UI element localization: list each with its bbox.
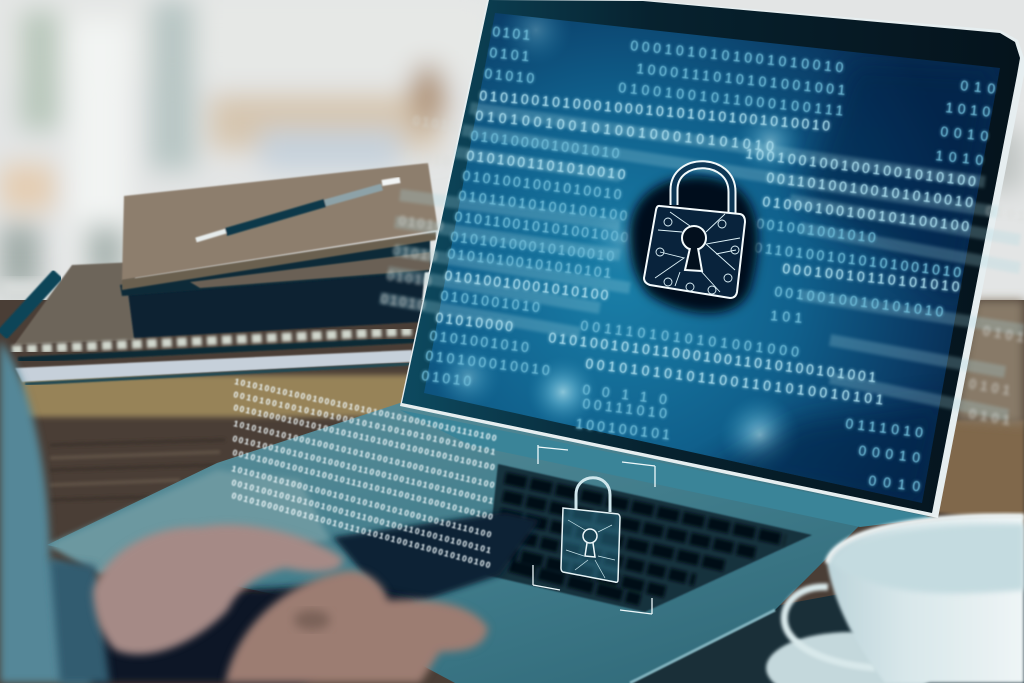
- binary code on screen: 0101: [492, 23, 531, 43]
- binary code on screen: 001010101011001101010010101: [585, 355, 885, 408]
- binary code on screen: 0101: [489, 44, 530, 64]
- binary code on screen: 01001001011000100111: [618, 79, 844, 119]
- right hand: [225, 571, 488, 683]
- binary code on screen: 0101001001010010: [462, 167, 623, 203]
- notebooks and pen: [2, 163, 438, 384]
- binary code on screen: 01000100100101100100: [762, 193, 970, 234]
- dark book: [128, 270, 425, 338]
- binary code on screen: 0010: [940, 123, 989, 144]
- holographic binary over trackpad: 10101001010001000101010100101000100101110100: [234, 376, 498, 443]
- ghost digits outside the screen: 01010: [380, 290, 427, 313]
- phone: [333, 512, 540, 600]
- top notebook: [122, 163, 438, 280]
- binary code on screen: 00110: [582, 381, 668, 407]
- laptop screen: [400, 0, 1024, 518]
- binary code on screen: 1010: [935, 147, 984, 168]
- binary code on screen: 0101001101010010: [466, 147, 627, 183]
- coffee cup and saucer: [766, 516, 1024, 683]
- binary code on screen: 0010010010101010: [774, 283, 945, 320]
- middle book strip: [120, 237, 430, 296]
- ghost digits outside the screen: [380, 112, 1024, 428]
- binary code on screen: 1010: [945, 99, 991, 120]
- binary code on screen: 1001001001001001010100: [745, 145, 977, 189]
- binary code on screen: 0101001010001000101010101001010010: [479, 87, 831, 134]
- ghost digits outside the screen: 01010: [392, 242, 439, 264]
- binary code on screen: 001001001010: [756, 215, 877, 246]
- ghost digits outside the screen: 01010: [412, 112, 459, 134]
- binary code on screen: 010100010010: [425, 347, 551, 378]
- holographic binary over trackpad: 00101001001010010001011000100110100101000101: [230, 477, 492, 555]
- holographic binary over trackpad: 00101000010010100101110101010010100010100100: [232, 447, 494, 522]
- ghost digits outside the screen: 0101: [967, 405, 1012, 428]
- ghost digits outside the screen: 0101: [967, 375, 1012, 398]
- lower notebook cover: [14, 262, 135, 345]
- binary code on screen: 101: [770, 307, 803, 326]
- binary code on screen: 00110100100101010010: [766, 169, 974, 210]
- holographic binary over trackpad: 00101001001010010001011000100110100101000101: [232, 433, 495, 506]
- notebook pages: [15, 350, 412, 382]
- binary code on screen: 01010010010100100010101010: [475, 107, 775, 154]
- binary code on screen: 01010100101010101: [447, 245, 613, 281]
- icon: small padlock on keyboard: [533, 445, 655, 614]
- binary code on screen: 010100001001010: [470, 127, 621, 161]
- ghost data bands across screen: [380, 108, 1024, 415]
- binary code on screen: 0001010101001010010: [630, 37, 844, 75]
- binary code on screen: 00111010: [582, 395, 668, 421]
- holographic binary over trackpad: 00101000010010100101110101010010100010100100: [230, 490, 492, 570]
- binary code on screen: 01010010101100010011010100101001: [548, 329, 877, 385]
- keyboard: [486, 464, 812, 612]
- binary code on screen: 01010: [421, 367, 472, 389]
- pen: [196, 180, 400, 240]
- binary code on screen: 01010: [484, 65, 535, 86]
- blurred office background: [0, 0, 1024, 320]
- holographic binary over trackpad: [230, 376, 498, 570]
- binary code on screen: 0101001010: [429, 327, 530, 355]
- blue strap: [2, 274, 58, 335]
- binary code on screen: 01010000: [435, 309, 514, 335]
- laptop base: [47, 403, 935, 683]
- notebook spiral: [12, 331, 416, 350]
- binary code on screen: 01101001010101001010: [754, 239, 962, 280]
- binary code on screen: 1000111010101001001: [636, 60, 846, 98]
- binary code on screen: 01010100010100010: [450, 228, 616, 264]
- sleeve: [0, 340, 95, 683]
- icon: large padlock: [630, 165, 758, 313]
- binary code on screen: 0010: [868, 472, 921, 494]
- binary code on screen: 100100101: [575, 415, 671, 443]
- binary code on screen: 01011010100100100: [458, 187, 629, 224]
- binary code on screen: [421, 23, 996, 494]
- holographic binary over trackpad: 10101001010001000101010100101000100101110100: [233, 418, 496, 490]
- binary code on screen: 01010010001010100: [444, 267, 610, 303]
- holographic binary over trackpad: 00101000010010100101011010010100010010100100: [233, 402, 496, 472]
- binary code on screen: 00010: [858, 442, 921, 466]
- holographic binary over trackpad: 00101001001010010001010100100101001000101: [233, 389, 497, 457]
- left hand: [93, 525, 343, 654]
- ghost digits outside the screen: 01010: [405, 147, 452, 169]
- binary code on screen: 0101001010: [440, 287, 541, 315]
- ghost digits outside the screen: 01010: [386, 267, 433, 289]
- wooden desk: [0, 300, 1024, 683]
- binary code on screen: 010110010101001000: [454, 208, 629, 245]
- binary code on screen: 0111010: [845, 415, 924, 441]
- holographic binary over trackpad: 10101001010001000101010100101000100101110100: [231, 463, 493, 540]
- ghost digits outside the screen: 01010: [398, 212, 445, 234]
- binary code on screen: 00010010110101010: [782, 260, 961, 295]
- binary code on screen: 010: [960, 77, 996, 97]
- phone and hands: [0, 340, 540, 683]
- binary code on screen: 0011101010101001000: [580, 317, 800, 360]
- shadow under hands: [90, 585, 420, 683]
